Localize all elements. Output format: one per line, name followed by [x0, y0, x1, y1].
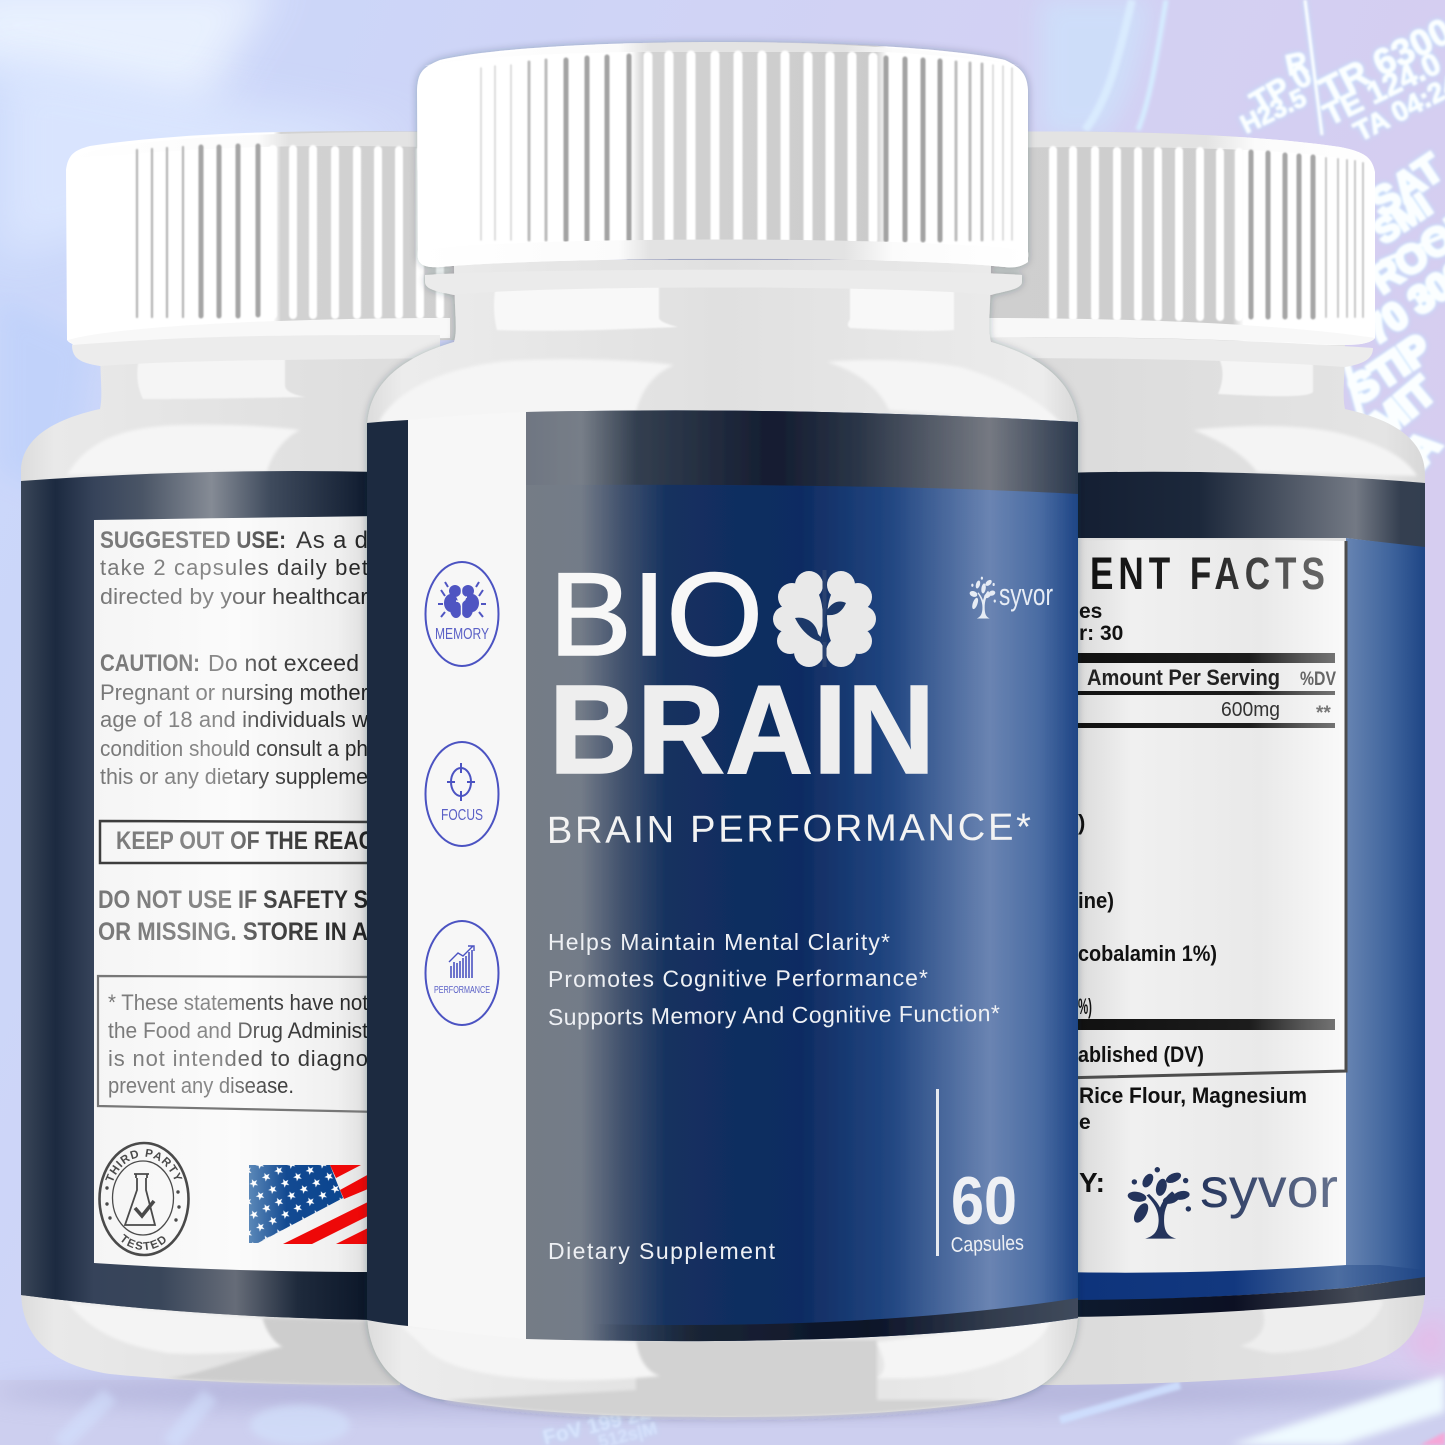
benefit icon: performance: [426, 921, 498, 1025]
left bottle bottom highlight: [68, 1303, 283, 1354]
bottom gray base: [445, 1340, 1000, 1417]
background scan data text: R: [1283, 46, 1311, 83]
subtitle: BRAIN PERFORMANCE*: [547, 807, 1031, 852]
ingredient fragments: ine): [1078, 888, 1114, 913]
right bottle cap: [980, 132, 1375, 367]
benefits list: Helps Maintain Mental Clarity*: [548, 929, 890, 955]
caution text: Pregnant or nursing mother: [100, 680, 368, 705]
ingredient fragments: e: [1079, 1111, 1091, 1134]
left bottle body: [21, 340, 440, 1385]
logo: syvor small: [969, 577, 1053, 618]
background scan data text: STIP: [1340, 326, 1439, 412]
icon: third party tested badge: [98, 1105, 229, 1270]
right bottle neck highlight: [1218, 353, 1313, 396]
ingredient fragments: ): [1078, 810, 1085, 835]
right bottle lower blue band: [1060, 1265, 1425, 1301]
left bottle lower label band: [21, 1255, 380, 1320]
ingredient fragments: %): [1078, 994, 1092, 1019]
caution text: age of 18 and individuals w: [100, 707, 368, 732]
left bottle cap: [66, 131, 460, 366]
background scan data text: SMI: [1367, 186, 1439, 252]
logo: syvor small: syvor: [999, 577, 1053, 612]
center label bottom band: [526, 1298, 1078, 1341]
right bottle blue strip: [1346, 538, 1425, 1282]
right bottle lower dark band: [1060, 1277, 1425, 1317]
benefit icon: performance: PERFORMANCE: [434, 985, 490, 996]
left bottle shoulder highlight: [67, 425, 300, 475]
left bottle white panel: [94, 516, 380, 1272]
center label white strip: [408, 412, 526, 1339]
center bottle: [367, 42, 1078, 1417]
shoulder highlight right: [827, 360, 1062, 424]
FDA disclaimer box: [98, 976, 380, 1112]
right bottle label band: [1060, 472, 1425, 548]
icon: brain with leaves: [773, 570, 876, 667]
background scan data text: H23.5: [1235, 82, 1311, 139]
center bottle cap: [417, 42, 1028, 267]
center bottle body: [367, 260, 1078, 1417]
keep out of reach box: KEEP OUT OF THE REAC: [116, 827, 374, 855]
caution text: CAUTION:: [100, 650, 200, 677]
proprietary amount row: [1221, 699, 1331, 724]
FDA disclaimer box: is not intended to diagno: [108, 1046, 368, 1071]
benefits list: Supports Memory And Cognitive Function*: [548, 1000, 1000, 1030]
left bottle label band: [21, 471, 380, 1320]
bottom highlight right: [877, 1320, 1050, 1378]
capsule count: Capsules: [950, 1231, 1024, 1257]
center label side strip: [367, 420, 408, 1326]
logo: syvor: [1127, 1156, 1338, 1239]
icon: third party tested badge: TESTED: [121, 1234, 166, 1250]
supplement facts heading: ENT FACTS: [1090, 548, 1330, 599]
title: BIO: BIO: [549, 549, 763, 681]
benefit icon: focus: FOCUS: [441, 807, 483, 824]
suggested use text: [100, 527, 368, 609]
bottom highlight left: [400, 1325, 660, 1380]
keep out of reach box: [100, 821, 380, 863]
icon: american flag: [249, 1165, 380, 1244]
center label top band: [526, 410, 1078, 494]
dietary supplement label: Dietary Supplement: [548, 1238, 776, 1264]
benefits list: [548, 929, 1000, 1030]
capsule count: 60: [951, 1163, 1017, 1239]
servings text: r: 30: [1079, 622, 1123, 645]
background scan data text: [541, 0, 1445, 1445]
suggested use text: take 2 capsules daily bet: [100, 555, 368, 580]
shoulder highlight left: [380, 359, 674, 424]
caution text: this or any dietary suppleme: [100, 764, 368, 789]
suggested use text: directed by your healthcar: [100, 584, 368, 609]
logo: syvor: syvor: [1200, 1156, 1338, 1219]
suggested use text: SUGGESTED USE:: [100, 527, 286, 554]
proprietary amount row: **: [1316, 703, 1331, 724]
facts box border: [1060, 541, 1346, 1078]
caution text: condition should consult a ph: [100, 736, 368, 761]
center label main panel: [526, 410, 1078, 1341]
background scan data text: MIT: [1363, 369, 1444, 447]
right bottle: [980, 132, 1425, 1385]
caution text: [100, 650, 368, 789]
capsule divider: [936, 1089, 939, 1256]
title: BRAIN: BRAIN: [549, 659, 935, 800]
caution text: Do not exceed: [208, 650, 359, 676]
left bottle neck highlight: [137, 351, 305, 399]
amount per serving row: %DV: [1300, 669, 1336, 690]
proprietary amount row: 600mg: [1221, 699, 1280, 721]
right bottle body: [1020, 340, 1425, 1385]
benefits list: Promotes Cognitive Performance*: [548, 965, 928, 992]
facts table rules: [1078, 653, 1335, 1030]
ingredient fragments: Y:: [1079, 1167, 1105, 1198]
do not use warning: OR MISSING. STORE IN A: [98, 918, 368, 946]
benefit icon: memory: [426, 562, 498, 666]
servings text: es: [1079, 600, 1102, 623]
background scan data text: TE 124.0: [1318, 46, 1445, 132]
neck collar: [425, 270, 1022, 295]
right bottle shoulder highlight: [1193, 426, 1417, 476]
benefit icon: memory: MEMORY: [435, 626, 489, 643]
FDA disclaimer box: prevent any disease.: [108, 1073, 294, 1098]
suggested use text: As a d: [296, 527, 368, 554]
ingredient fragments: Rice Flour, Magnesium: [1079, 1083, 1307, 1108]
background scan data text: TP 0: [1244, 57, 1318, 120]
ingredient fragments: [1078, 810, 1307, 1198]
benefit icon: focus: [426, 742, 498, 846]
ingredient fragments: cobalamin 1%): [1078, 941, 1217, 966]
ingredient fragments: ablished (DV): [1078, 1042, 1204, 1067]
right bottle bottom highlight: [1240, 1300, 1383, 1353]
left bottle bottom shade: [165, 1318, 400, 1385]
do not use warning: [98, 886, 368, 946]
icon: third party tested badge: THIRD PARTY: [105, 1148, 182, 1180]
right bottle white panel: [1060, 540, 1346, 1273]
do not use warning: DO NOT USE IF SAFETY S: [98, 886, 368, 914]
FDA disclaimer box: * These statements have not: [108, 990, 368, 1015]
amount per serving row: Amount Per Serving: [1087, 665, 1280, 690]
FDA disclaimer box: the Food and Drug Administ: [108, 1018, 368, 1043]
left bottle: [21, 131, 456, 1386]
servings text: [1079, 600, 1123, 645]
neck highlights: [494, 275, 954, 331]
